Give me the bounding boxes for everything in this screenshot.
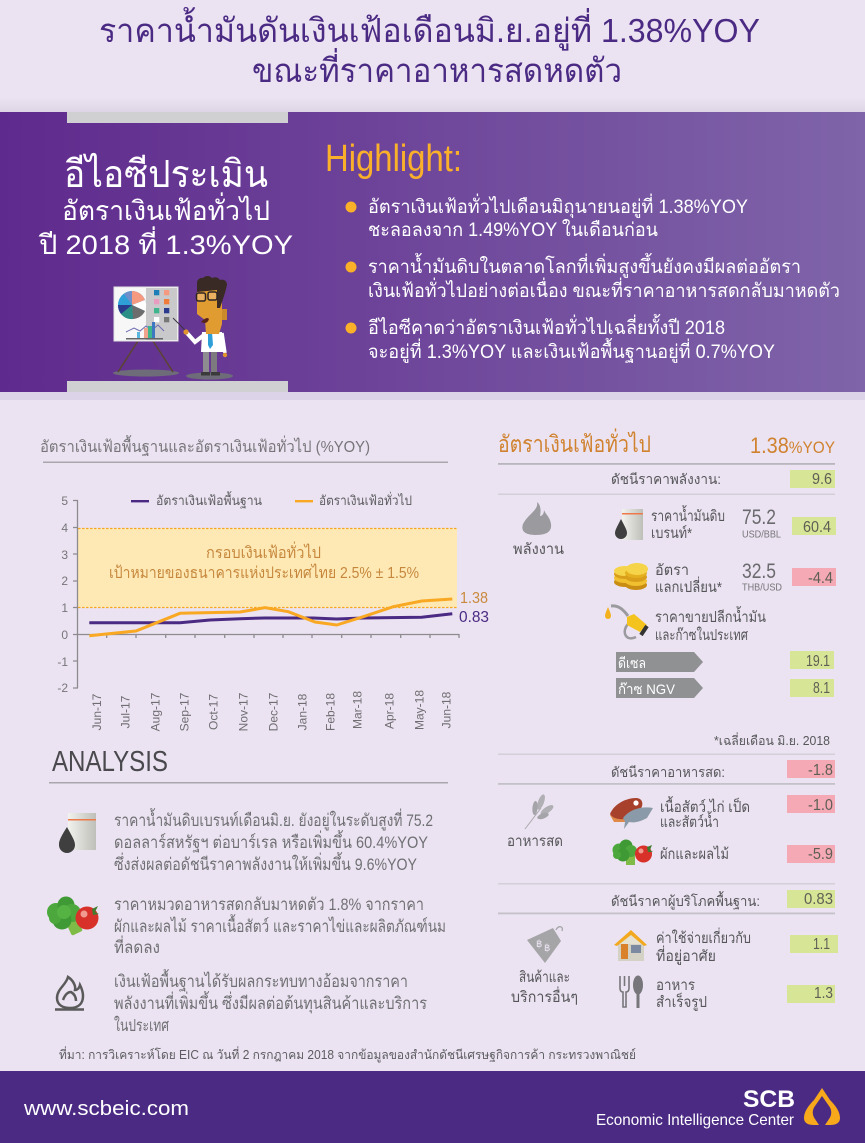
- row: retail fuel: และก๊าซในประเทศ: [655, 626, 748, 644]
- category: other goods and services: ฿: [536, 939, 542, 950]
- x axis labels: [90, 690, 454, 731]
- bullet: forecast: จะอยู่ที่ 1.3%YOY และเงินเฟ้อพื้นฐานอยู่ที่ 0.7%YOY: [368, 338, 775, 363]
- target band: เป้าหมายของธนาคารแห่งประเทศไทย 2.5% ± 1.5%: [109, 563, 419, 582]
- x axis labels: Nov-17: [236, 692, 250, 731]
- text: oil analysis: ราคาน้ำมันดิบเบรนท์เดือนมิ.ย. ยังอยู่ในระดับสูงที่ 75.2: [114, 808, 433, 831]
- series: headline inflation: [89, 599, 452, 636]
- category: other goods and services: [511, 927, 578, 1006]
- row: housing: [614, 927, 838, 965]
- heading: EIC forecast: อีไอซีประเมิน: [64, 153, 268, 196]
- bullet: oil prices: ราคาน้ำมันดิบในตลาดโลกที่เพิ่มสูงขึ้นยังคงมีผลต่ออัตรา: [368, 253, 801, 278]
- category: energy: พลังงาน: [513, 541, 564, 558]
- row: exchange rate: อัตรา: [655, 562, 689, 579]
- heading: ANALYSIS: ANALYSIS: [52, 746, 168, 778]
- text: core analysis: พลังงานที่เพิ่มขึ้น ซึ่งมีผลต่อต้นทุนสินค้าและบริการ: [114, 991, 427, 1014]
- row: diesel: 19.1: [806, 653, 830, 670]
- legend: อัตราเงินเฟ้อพื้นฐาน: [156, 491, 262, 509]
- legend: อัตราเงินเฟ้อทั่วไป: [319, 492, 412, 508]
- row: Brent crude: เบรนท์*: [651, 525, 692, 542]
- footer: [0, 1071, 865, 1143]
- panel: highlight band: [0, 112, 865, 400]
- row: retail fuel: [605, 606, 766, 644]
- x axis labels: May-18: [412, 690, 426, 730]
- text: food analysis: ผักและผลไม้ ราคาเนื้อสัตว์ และราคาไข่และผลิตภัณฑ์นม: [114, 914, 446, 936]
- row: exchange rate: THB/USD: [742, 582, 782, 594]
- text: food analysis: ราคาหมวดอาหารสดกลับมาหดตัว 1.8% จากราคา: [114, 895, 424, 914]
- row: energy index: 9.6: [812, 471, 832, 488]
- source note: ที่มา: การวิเคราะห์โดย EIC ณ วันที่ 2 กรกฎาคม 2018 จากข้อมูลของสำนักดัชนีเศรษฐกิจการค้า กระทรวงพาณิชย์: [59, 1046, 636, 1063]
- category: other goods and services: ฿: [544, 943, 550, 954]
- heading: EIC forecast: ปี 2018 ที่ 1.3%YOY: [38, 226, 293, 260]
- row: exchange rate: -4.4: [808, 570, 833, 587]
- row: core CPI: ดัชนีราคาผู้บริโภคพื้นฐาน:: [611, 891, 760, 910]
- end labels: 1.38: [460, 590, 488, 607]
- row: NGV: ก๊าซ NGV: [618, 681, 676, 697]
- text: core analysis: ในประเทศ: [114, 1015, 169, 1035]
- heading: headline inflation: อัตราเงินเฟ้อทั่วไป: [498, 428, 651, 457]
- category: fresh food: [507, 793, 563, 850]
- row: vegetables and fruit: ผักและผลไม้: [660, 845, 729, 863]
- bullet: oil prices: เงินเฟ้อทั่วไปอย่างต่อเนื่อง ขณะที่ราคาอาหารสดกลับมาหดตัว: [368, 277, 840, 302]
- bullet: headline inflation: ชะลอลงจาก 1.49%YOY ในเดือนก่อน: [368, 219, 658, 241]
- text: food analysis: ที่ลดลง: [114, 935, 160, 957]
- row: vegetables and fruit: [612, 840, 835, 865]
- x axis labels: Jun-17: [90, 693, 104, 730]
- brand name: [596, 1086, 795, 1129]
- row: fresh food index: [611, 760, 835, 780]
- bullet: forecast: อีไอซีคาดว่าอัตราเงินเฟ้อทั่วไปเฉลี่ยทั้งปี 2018: [368, 314, 725, 339]
- category: other goods and services: สินค้าและ: [519, 969, 570, 986]
- text: oil analysis: [114, 808, 433, 874]
- x axis labels: Aug-17: [148, 692, 162, 731]
- row: NGV: 8.1: [813, 680, 830, 697]
- x axis labels: Mar-18: [350, 691, 364, 729]
- icon: flame: [55, 977, 84, 1010]
- row: energy index: [611, 470, 835, 488]
- row: core CPI: [611, 890, 835, 910]
- y axis labels: -2: [57, 681, 68, 695]
- row: diesel: [616, 651, 834, 672]
- illustration: presenter with chart board: [113, 276, 233, 380]
- y axis labels: [57, 494, 68, 695]
- row: prepared food: สำเร็จรูป: [656, 992, 707, 1011]
- row: housing: ค่าใช้จ่ายเกี่ยวกับ: [656, 927, 751, 947]
- line chart: core and headline inflation: [57, 491, 489, 731]
- row: exchange rate: 32.5: [742, 560, 776, 583]
- x axis labels: Sep-17: [178, 692, 192, 731]
- y axis labels: 3: [61, 548, 68, 562]
- row: vegetables and fruit: -5.9: [808, 846, 833, 863]
- icon: vegetables: [47, 896, 99, 936]
- row: Brent crude: 75.2: [742, 506, 776, 529]
- heading: Highlight: Highlight:: [325, 138, 462, 180]
- row: housing: ที่อยู่อาศัย: [656, 945, 716, 965]
- row: meat: -1.0: [808, 797, 833, 814]
- row: prepared food: อาหาร: [656, 977, 695, 994]
- category: fresh food: อาหารสด: [507, 833, 563, 850]
- brand name: Economic Intelligence Center: [596, 1112, 795, 1129]
- row: meat: [610, 795, 835, 831]
- heading: EIC forecast: อัตราเงินเฟ้อทั่วไป: [62, 192, 270, 226]
- text: food analysis: [114, 895, 446, 957]
- heading: headline inflation: [498, 428, 835, 458]
- text: core analysis: [114, 969, 427, 1035]
- row: exchange rate: [614, 560, 836, 596]
- heading: headline inflation: 1.38%YOY: [750, 433, 835, 458]
- text: oil analysis: ดอลลาร์สหรัฐฯ ต่อบาร์เรล หรือเพิ่มขึ้น 60.4%YOY: [114, 830, 428, 853]
- row: retail fuel: ราคาขายปลีกน้ำมัน: [655, 606, 766, 626]
- title: [99, 7, 760, 89]
- row: fresh food index: ดัชนีราคาอาหารสด:: [611, 764, 725, 780]
- note: monthly average: *เฉลี่ยเดือน มิ.ย. 2018: [714, 732, 830, 748]
- row: NGV: [616, 678, 834, 698]
- row: energy index: ดัชนีราคาพลังงาน:: [611, 471, 721, 487]
- bullet: oil prices: [346, 253, 840, 302]
- logo: SCB bai sema: [804, 1088, 840, 1125]
- x axis labels: Apr-18: [382, 693, 396, 729]
- bullet: forecast: [346, 314, 775, 363]
- row: core CPI: 0.83: [804, 891, 833, 908]
- row: meat: และสัตว์น้ำ: [660, 811, 719, 831]
- category: other goods and services: บริการอื่นๆ: [511, 986, 578, 1006]
- row: fresh food index: -1.8: [808, 762, 833, 779]
- row: Brent crude: 60.4: [803, 519, 831, 536]
- x axis labels: Dec-17: [266, 692, 280, 731]
- row: prepared food: [620, 976, 835, 1011]
- y axis labels: 2: [61, 574, 68, 588]
- row: Brent crude: USD/BBL: [742, 530, 781, 540]
- bullet: headline inflation: อัตราเงินเฟ้อทั่วไปเดือนมิถุนายนอยู่ที่ 1.38%YOY: [368, 193, 748, 219]
- heading: EIC forecast: [38, 153, 293, 260]
- x axis labels: Jan-18: [296, 693, 310, 730]
- row: housing: 1.1: [813, 936, 830, 953]
- row: Brent crude: [615, 505, 836, 542]
- target band: [78, 528, 457, 608]
- y axis labels: 0: [61, 628, 68, 642]
- panel: analysis: [47, 746, 448, 1035]
- chart heading: อัตราเงินเฟ้อพื้นฐานและอัตราเงินเฟ้อทั่วไป (%YOY): [40, 435, 370, 456]
- text: oil analysis: ซึ่งส่งผลต่อดัชนีราคาพลังงานให้เพิ่มขึ้น 9.6%YOY: [114, 852, 417, 874]
- website: www.scbeic.com: [23, 1098, 189, 1120]
- target band: กรอบเงินเฟ้อทั่วไป: [206, 541, 321, 562]
- icon: oil barrel: [59, 813, 96, 853]
- text: core analysis: เงินเฟ้อพื้นฐานได้รับผลกระทบทางอ้อมจากราคา: [114, 969, 408, 992]
- bullet: headline inflation: [346, 193, 748, 241]
- y axis labels: 5: [61, 494, 68, 508]
- category: energy: [513, 502, 564, 558]
- row: prepared food: 1.3: [814, 985, 833, 1002]
- title: ขณะที่ราคาอาหารสดหดตัว: [252, 48, 622, 89]
- end labels: 0.83: [459, 609, 489, 626]
- end labels: [459, 590, 489, 626]
- row: exchange rate: แลกเปลี่ยน*: [655, 576, 722, 596]
- legend: [131, 491, 412, 509]
- series: core inflation: [89, 614, 452, 623]
- x axis labels: Jul-17: [118, 695, 132, 728]
- x axis labels: Jun-18: [440, 691, 454, 728]
- y axis labels: 1: [61, 601, 68, 615]
- y axis labels: 4: [61, 521, 68, 535]
- y axis labels: -1: [57, 655, 68, 669]
- brand name: SCB: [743, 1086, 795, 1113]
- x axis labels: Feb-18: [324, 693, 338, 731]
- panel: inflation breakdown: [498, 428, 838, 1011]
- title: ราคาน้ำมันดันเงินเฟ้อเดือนมิ.ย.อยู่ที่ 1.38%YOY: [99, 7, 760, 51]
- row: meat: เนื้อสัตว์ ไก่ เป็ด: [660, 796, 750, 816]
- x axis labels: Oct-17: [206, 694, 220, 730]
- row: Brent crude: ราคาน้ำมันดิบ: [651, 505, 725, 525]
- row: diesel: ดีเซล: [618, 655, 646, 671]
